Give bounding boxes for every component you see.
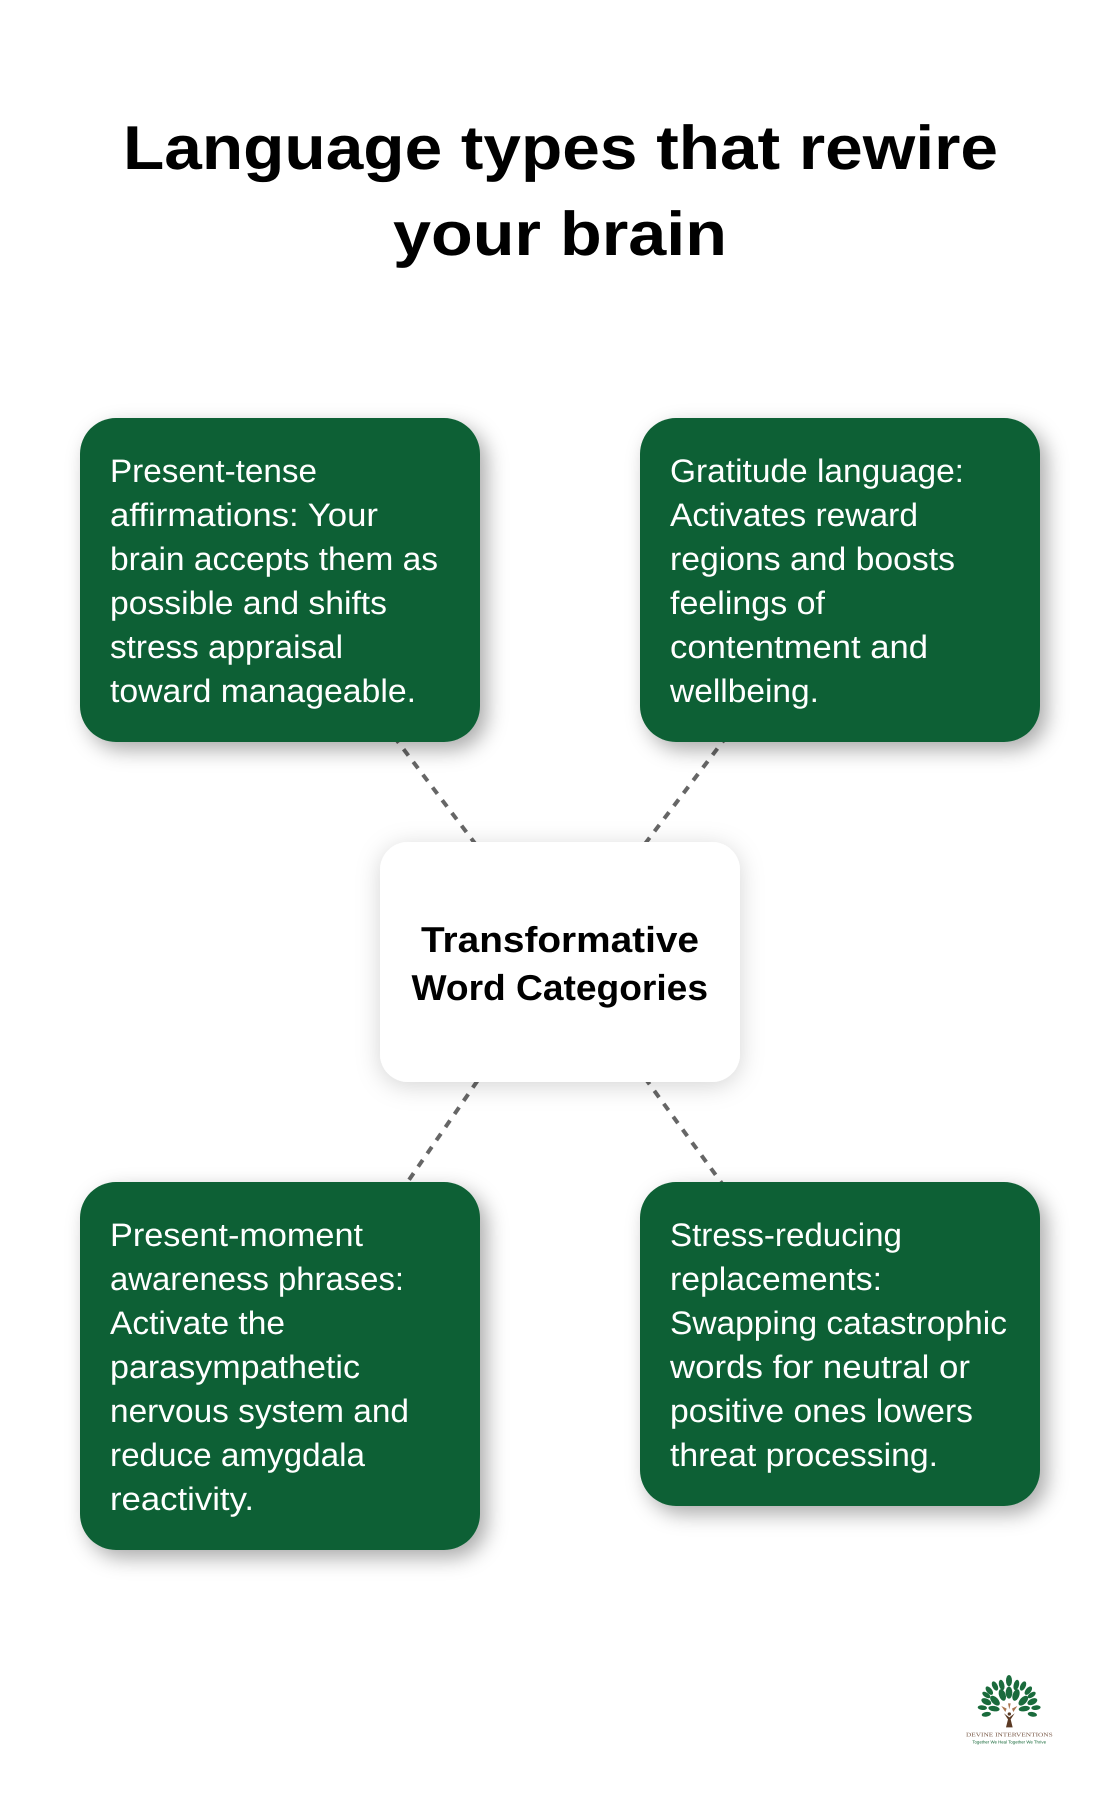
panel: present-moment awareness: [80, 1182, 480, 1550]
panel: present-tense affirmations: Present-tense: [110, 453, 317, 489]
panel: gratitude language: feelings of: [670, 585, 826, 621]
title: your brain: [393, 200, 727, 269]
panel: present-moment awareness: nervous system and: [110, 1393, 409, 1429]
panel: gratitude language: [640, 418, 1040, 742]
connector: top-left card to center: [394, 736, 480, 850]
panel: gratitude language: Gratitude language:: [670, 453, 964, 489]
panel: gratitude language: contentment and: [670, 629, 928, 665]
connector: bottom-left card to center: [402, 1068, 486, 1190]
panel: stress-reducing replacements: [640, 1182, 1040, 1506]
panel: gratitude language: regions and boosts: [670, 541, 955, 577]
panel: present-moment awareness: Present-moment: [110, 1217, 363, 1253]
panel: present-tense affirmations: stress appraisal: [110, 629, 343, 665]
logo: Devine Interventions tree: DEVINE INTERVENTIONS: [966, 1731, 1053, 1738]
panel: present-moment awareness: parasympathetic: [110, 1349, 360, 1385]
logo: Devine Interventions tree: [966, 1675, 1053, 1745]
panel: present-tense affirmations: toward manageable.: [110, 673, 416, 709]
logo: Devine Interventions tree: Together We Heal Together We Thrive: [972, 1740, 1046, 1745]
connector: bottom-right card to center: [645, 1078, 727, 1190]
panel: center node: [380, 842, 740, 1082]
panel: present-moment awareness: awareness phrases:: [110, 1261, 404, 1297]
panel: present-moment awareness: reactivity.: [110, 1481, 254, 1517]
panel: stress-reducing replacements: Swapping catastrophic: [670, 1305, 1007, 1341]
panel: center node: Transformative: [421, 919, 699, 960]
panel: center node: Word Categories: [412, 967, 708, 1008]
panel: stress-reducing replacements: positive ones lowers: [670, 1393, 973, 1429]
panel: gratitude language: wellbeing.: [669, 673, 819, 709]
panel: stress-reducing replacements: Stress-reducing: [670, 1217, 902, 1253]
panel: stress-reducing replacements: threat processing.: [670, 1437, 938, 1473]
panel: present-tense affirmations: [80, 418, 480, 742]
title: Language types that rewire: [123, 114, 998, 183]
panel: present-tense affirmations: affirmations: Your: [110, 497, 378, 533]
panel: stress-reducing replacements: words for neutral or: [669, 1349, 970, 1385]
panel: stress-reducing replacements: replacements:: [670, 1261, 882, 1297]
title: [123, 114, 998, 269]
panel: present-tense affirmations: brain accepts them as: [110, 541, 438, 577]
panel: present-moment awareness: reduce amygdala: [110, 1437, 366, 1473]
panel: gratitude language: Activates reward: [670, 497, 918, 533]
connector: top-right card to center: [640, 736, 727, 850]
panel: present-moment awareness: Activate the: [110, 1305, 285, 1341]
panel: present-tense affirmations: possible and shifts: [110, 585, 387, 621]
